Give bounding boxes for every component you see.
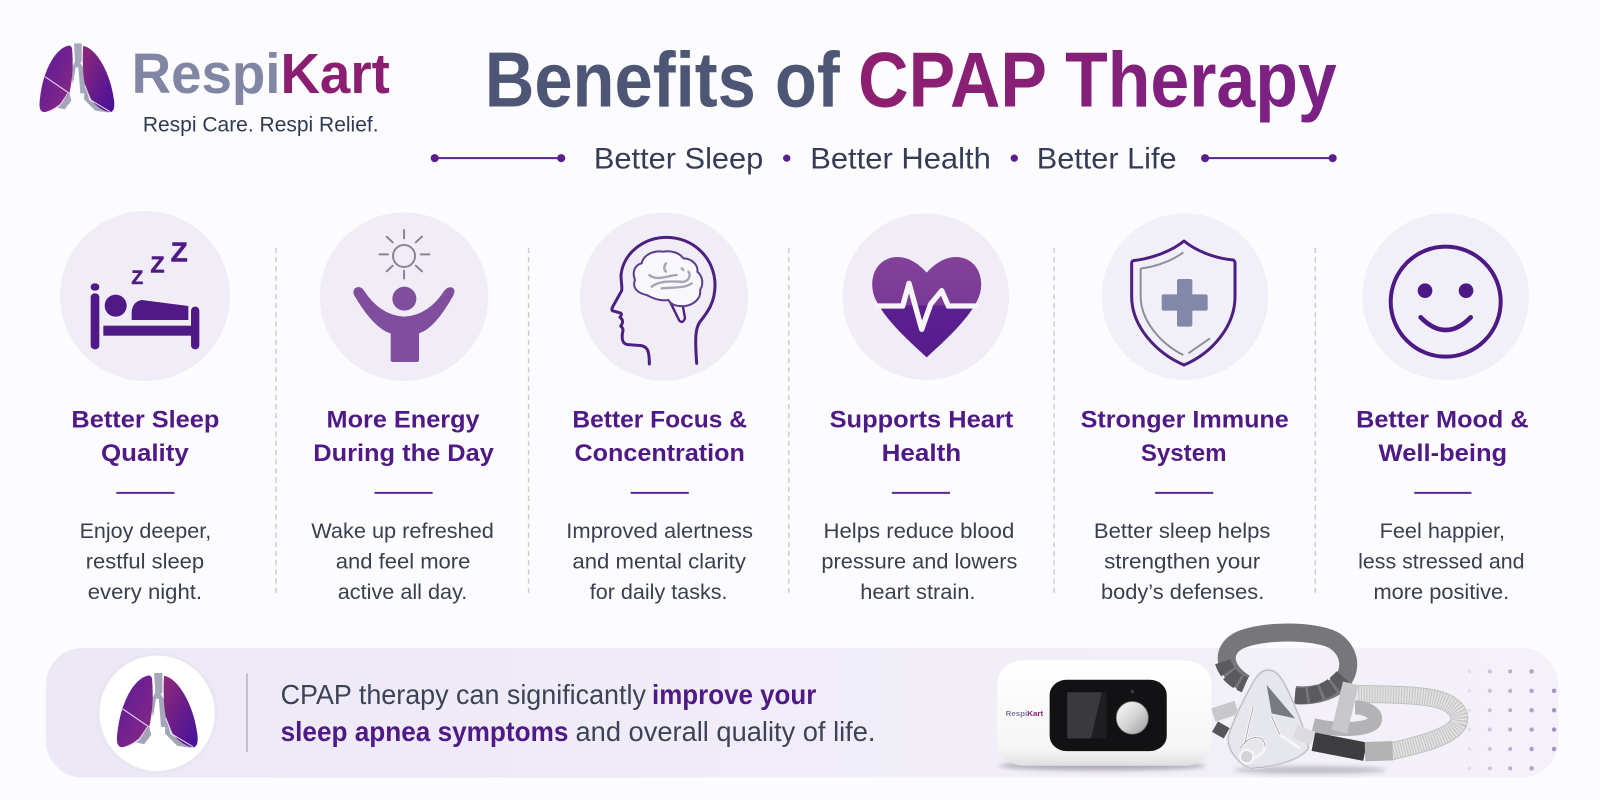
description: and mental clarity (572, 550, 746, 573)
icon: shield with cross (1102, 213, 1268, 380)
heading: Health (882, 440, 961, 467)
panel: stronger immune system (1081, 213, 1289, 604)
heading: Supports Heart (830, 407, 1013, 434)
description: every night. (88, 581, 202, 604)
icon: lungs logo (40, 43, 114, 113)
heading: Quality (101, 440, 189, 467)
CPAP device: RespiKart (1006, 710, 1043, 718)
heading: Stronger Immune (1081, 407, 1289, 434)
title (485, 38, 1337, 124)
CPAP mask (1215, 670, 1393, 768)
subtitle with connector lines: Better Life (1037, 142, 1177, 175)
description (1358, 520, 1524, 604)
description: and feel more (336, 550, 470, 573)
description: active all day. (338, 581, 467, 604)
subtitle with connector lines: Better Sleep (594, 142, 763, 175)
icon: sleeping person in bed (60, 211, 230, 381)
icon: head with brain (580, 213, 748, 381)
panel: better focus (566, 213, 753, 604)
banner text (281, 679, 876, 747)
icon: lungs in white circle (98, 654, 216, 772)
heading (1356, 407, 1529, 467)
CPAP device (997, 660, 1212, 771)
title: Benefits of (485, 38, 840, 124)
banner text: sleep apnea symptoms (281, 716, 568, 747)
subtitle with connector lines (432, 142, 1336, 175)
description: Wake up refreshed (311, 520, 494, 543)
panel: better sleep quality (60, 211, 230, 604)
panel: better mood (1356, 213, 1529, 604)
icon: sleeping person in bed: Z (150, 252, 165, 278)
icon: smiley face (1362, 213, 1529, 380)
heading: During the Day (313, 440, 494, 467)
description: strengthen your (1104, 550, 1260, 573)
description (80, 520, 211, 604)
description: Enjoy deeper, (80, 520, 211, 543)
icon: sleeping person in bed: Z (131, 268, 143, 289)
heading (830, 407, 1013, 467)
heading (1081, 407, 1289, 467)
banner text: and overall quality of life. (576, 716, 876, 747)
description: more positive. (1373, 581, 1509, 604)
heading: More Energy (327, 407, 480, 434)
CPAP hose and headgear (1213, 633, 1459, 774)
description: Feel happier, (1380, 520, 1505, 543)
logo: RespiKart (40, 42, 390, 137)
panel: supports heart health (821, 213, 1017, 604)
icon: heart with pulse (842, 213, 1009, 380)
description: Helps reduce blood (823, 520, 1014, 543)
heading: Better Sleep (71, 407, 219, 434)
description (311, 520, 494, 604)
description: less stressed and (1358, 550, 1524, 573)
panel: bottom banner (46, 633, 1558, 778)
heading: System (1141, 440, 1227, 467)
description (821, 520, 1017, 604)
description (1094, 520, 1270, 604)
heading: Better Focus & (572, 407, 747, 434)
description: Better sleep helps (1094, 520, 1270, 543)
heading: Concentration (574, 440, 745, 467)
banner text: CPAP therapy can significantly (281, 679, 646, 710)
panel: more energy (311, 212, 494, 604)
heading (313, 407, 494, 467)
description: Improved alertness (566, 520, 753, 543)
icon: sleeping person in bed: Z (171, 237, 188, 268)
tagline: Respi Care. Respi Relief. (143, 113, 379, 137)
description: for daily tasks. (590, 581, 728, 604)
title: CPAP Therapy (858, 38, 1337, 124)
banner text: improve your (652, 679, 816, 710)
description: pressure and lowers (821, 550, 1017, 573)
heading: Better Mood & (1356, 407, 1529, 434)
icon: person with raised arms under sun (320, 212, 488, 381)
description: heart strain. (860, 581, 976, 604)
description: restful sleep (86, 550, 204, 573)
logo wordmark: RespiKart (132, 42, 390, 105)
subtitle with connector lines: Better Health (810, 142, 991, 175)
heading (572, 407, 747, 467)
heading (71, 407, 219, 467)
description: body’s defenses. (1101, 581, 1264, 604)
description (566, 520, 753, 604)
heading: Well-being (1379, 440, 1507, 467)
